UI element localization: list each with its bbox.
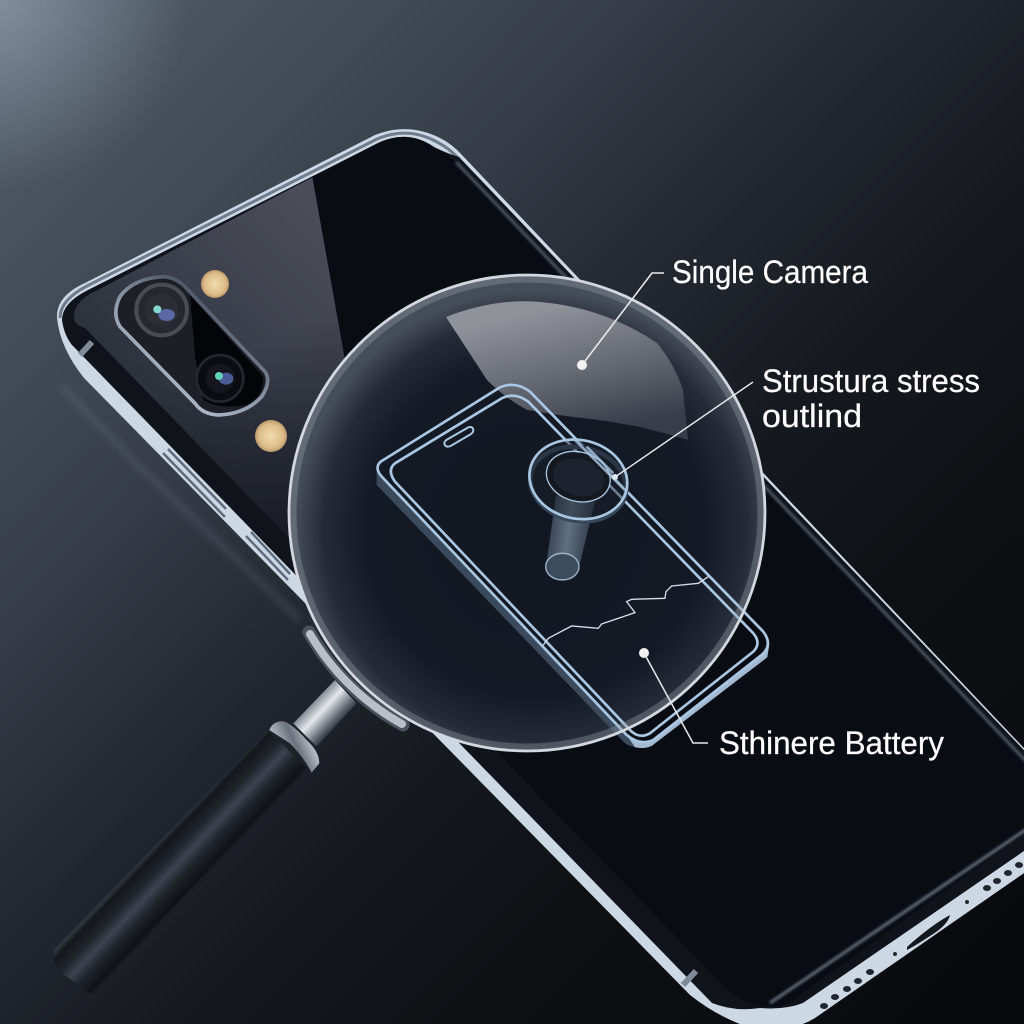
outline slab lower right — [627, 645, 769, 748]
callout: Battery — [639, 648, 944, 761]
magnifying lens — [288, 274, 769, 752]
metal stem — [293, 680, 357, 747]
glossy left reflection — [74, 178, 345, 538]
callout: Battery: Sthinere Battery — [719, 725, 944, 761]
callout: Structure stress outline: outlind — [762, 398, 862, 434]
right edge glow — [456, 162, 1024, 776]
lens rim — [293, 279, 761, 747]
lens upper — [136, 285, 187, 335]
earpiece notch — [444, 427, 473, 447]
callout: Structure stress outline — [612, 363, 980, 480]
camera stress cylinder — [546, 495, 595, 580]
pill dark reflection — [190, 295, 263, 407]
phone back glass — [74, 137, 1024, 1007]
bottom edge glow — [770, 820, 1024, 1003]
lens body — [288, 274, 766, 752]
camera pill housing — [116, 277, 268, 415]
magnifier handle — [53, 680, 357, 996]
camera stress ring — [522, 431, 635, 530]
callout: Single Camera — [577, 254, 868, 370]
metal rim mount — [309, 632, 403, 725]
callout: Structure stress outline: Strustura stress — [762, 363, 980, 399]
callout: Single Camera: Single Camera — [672, 254, 868, 290]
outline inner edge — [391, 396, 757, 736]
flash dot upper — [201, 270, 229, 298]
bottom ports — [820, 862, 1023, 1009]
camera module — [116, 277, 268, 415]
lens lower — [197, 355, 243, 402]
outline outer edge — [378, 385, 768, 742]
crack line — [543, 577, 708, 645]
inner phone outline — [377, 385, 769, 748]
outline slab lower left — [377, 469, 637, 747]
lens highlight — [446, 301, 688, 440]
side buttons — [163, 449, 290, 580]
handle grip — [53, 730, 311, 996]
flash dot lower — [255, 420, 287, 452]
frame top edge shade — [60, 133, 459, 318]
metal collar — [269, 721, 319, 773]
outline segment over ring — [573, 438, 627, 492]
rim ticks — [80, 342, 696, 985]
